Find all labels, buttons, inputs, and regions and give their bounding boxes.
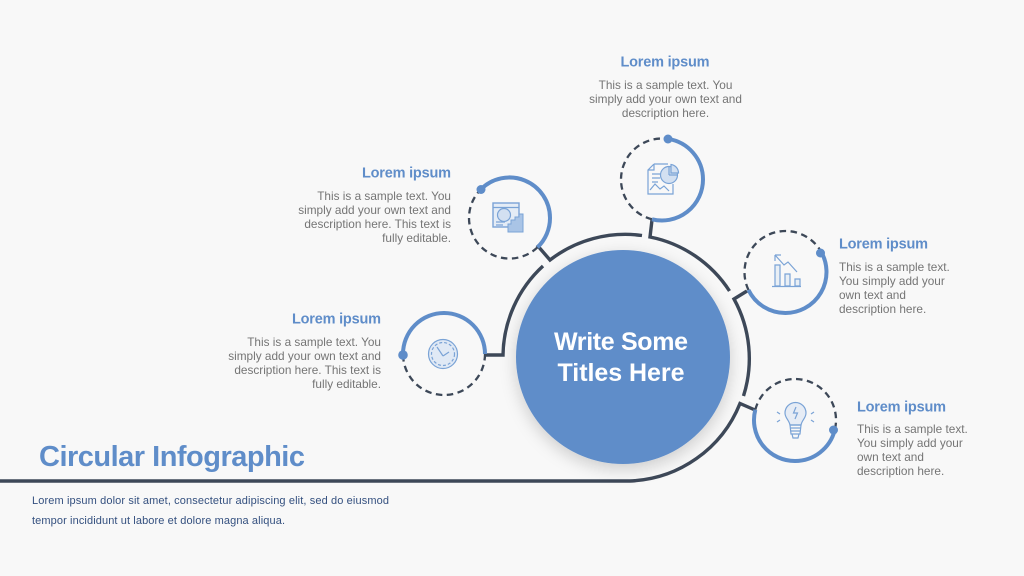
central circle with title: Titles Here bbox=[558, 359, 685, 387]
text block: lower right bbox=[857, 400, 968, 478]
text block: top bbox=[589, 54, 742, 120]
text block: upper left bbox=[298, 166, 451, 245]
text block: upper left: description here. This text is bbox=[304, 217, 451, 231]
text block: lower right: You simply add your bbox=[857, 436, 963, 450]
text block: lower left bbox=[228, 312, 381, 391]
text block: right: This is a sample text. bbox=[839, 260, 950, 274]
central circle with title bbox=[516, 250, 730, 464]
text block: right bbox=[839, 236, 950, 316]
text block: lower left: This is a sample text. You bbox=[247, 335, 381, 349]
node: top circle with report icon bbox=[621, 134, 703, 220]
text block: lower left: fully editable. bbox=[312, 377, 381, 391]
text block: upper left: simply add your own text and bbox=[298, 203, 451, 217]
text block: upper left: Lorem ipsum bbox=[362, 166, 451, 182]
node: upper-left circle with dashboard icon bbox=[469, 177, 550, 259]
text block: right: description here. bbox=[839, 302, 926, 316]
node: right circle with falling bar chart icon bbox=[744, 231, 826, 313]
text block: lower left: simply add your own text and bbox=[228, 349, 381, 363]
outer ring: base line and five arc segments bbox=[0, 220, 755, 481]
text block: right: Lorem ipsum bbox=[839, 236, 928, 252]
text block: top: description here. bbox=[622, 106, 709, 120]
text block: lower right: own text and bbox=[857, 450, 924, 464]
text block: upper left: fully editable. bbox=[382, 231, 451, 245]
description: tempor incididunt ut labore et dolore magna aliqua. bbox=[32, 515, 285, 527]
main heading: Circular Infographic bbox=[39, 441, 305, 473]
text block: lower left: Lorem ipsum bbox=[292, 312, 381, 328]
description: Lorem ipsum dolor sit amet, consectetur adipiscing elit, sed do eiusmod bbox=[32, 495, 389, 507]
description bbox=[32, 495, 389, 527]
text block: top: Lorem ipsum bbox=[620, 54, 710, 70]
text block: lower right: description here. bbox=[857, 464, 944, 478]
central circle with title: Write Some bbox=[554, 328, 688, 356]
text block: lower right: Lorem ipsum bbox=[857, 400, 946, 416]
text block: top: simply add your own text and bbox=[589, 92, 742, 106]
icon: light bulb bbox=[777, 403, 814, 438]
icon: bar chart with arrow bbox=[772, 255, 801, 286]
text block: right: You simply add your bbox=[839, 274, 945, 288]
text block: right: own text and bbox=[839, 288, 906, 302]
icon: dashboard screen with bars bbox=[493, 203, 523, 232]
text block: lower left: description here. This text is bbox=[234, 363, 381, 377]
text block: upper left: This is a sample text. You bbox=[317, 189, 451, 203]
text block: top: This is a sample text. You bbox=[599, 78, 732, 92]
icon: report with pie chart bbox=[648, 164, 679, 194]
icon: gauge clock bbox=[428, 340, 458, 368]
node: lower-right circle with light bulb icon bbox=[754, 379, 838, 461]
text block: lower right: This is a sample text. bbox=[857, 422, 968, 436]
node: lower-left circle with clock icon bbox=[398, 313, 485, 395]
